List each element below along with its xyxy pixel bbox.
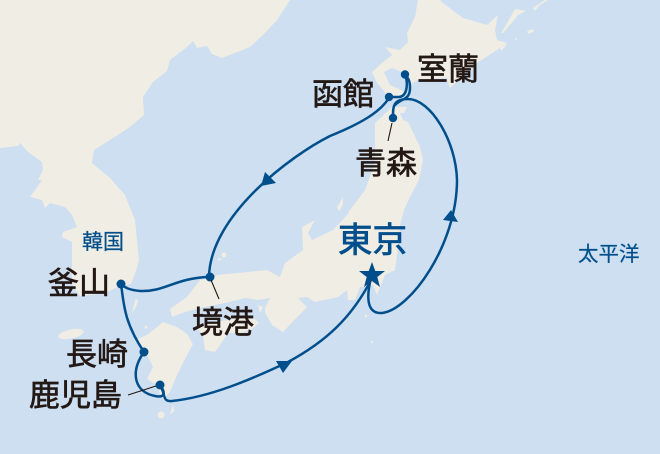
land: Kyushu (138, 322, 193, 399)
label: Nagasaki: 長崎 (66, 337, 128, 372)
arrow: toward Tokyo (276, 361, 292, 373)
arrow: toward Sakaiminato (261, 172, 276, 186)
route: Muroran to Hakodate (389, 75, 407, 97)
land: Hokkaido (372, 0, 507, 98)
leader lines (128, 123, 392, 395)
label: Korea: 韓国 (82, 231, 124, 254)
route: Kagoshima to Tokyo (160, 278, 372, 401)
route: Hakodate to Sakaiminato (209, 98, 389, 277)
icon: star marking Tokyo (359, 262, 385, 287)
label: Kagoshima: 鹿児島 (29, 378, 122, 413)
arrowheads (261, 172, 458, 373)
land: small islands (57, 0, 548, 418)
label: Muroran: 室蘭 (417, 52, 479, 87)
label: Hakodate: 函館 (312, 77, 374, 112)
route: Tokyo to Aomori (368, 99, 457, 313)
label: Tokyo: 東京 (338, 222, 407, 260)
route: Busan to Nagasaki (121, 284, 144, 352)
route line (121, 75, 457, 401)
land masses (0, 0, 548, 418)
label: Pacific Ocean: 太平洋 (578, 243, 640, 266)
label: Sakaiminato: 境港 (192, 305, 254, 340)
route: Sakaiminato to Busan (121, 277, 209, 291)
route: Aomori to Muroran (395, 75, 410, 105)
land: Asian mainland and Korea (0, 0, 290, 296)
port markers (116, 70, 409, 390)
land: Honshu (170, 107, 423, 332)
arrow: northbound off Honshu (443, 210, 458, 222)
route: Nagasaki to Kagoshima (136, 352, 164, 396)
label: Busan: 釜山 (48, 266, 110, 301)
label: Aomori: 青森 (355, 146, 417, 181)
land: Shikoku (195, 318, 259, 352)
